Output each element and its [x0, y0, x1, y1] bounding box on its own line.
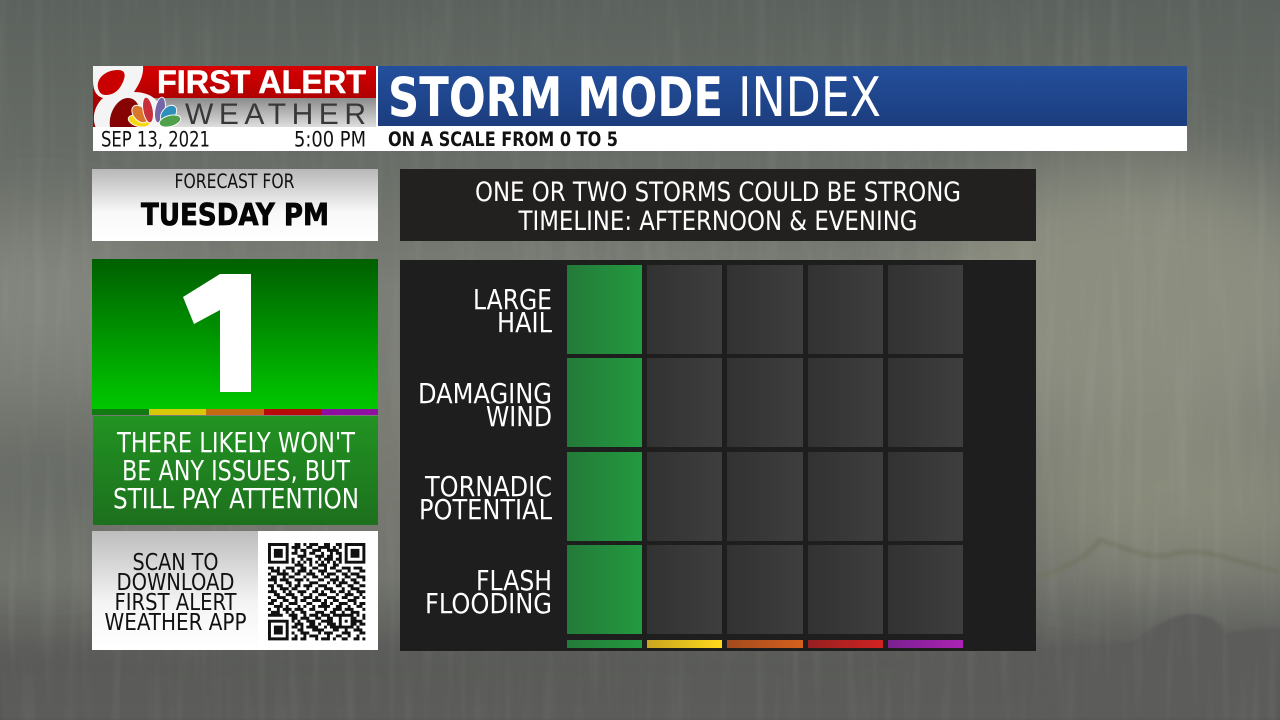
scale strip — [92, 409, 378, 415]
logo text: first alert: FIRST ALERT — [157, 64, 366, 100]
icon: NBC peacock — [127, 96, 182, 129]
title text: index: INDEX — [738, 66, 881, 129]
download text: WEATHER APP — [104, 610, 246, 636]
row: flash flooding: FLASH — [476, 564, 552, 597]
message line 2: BE ANY ISSUES, BUT — [122, 455, 351, 487]
row: tornadic potential: TORNADIC — [424, 470, 552, 503]
row: flash flooding: FLOODING — [425, 587, 552, 620]
row: tornadic potential: POTENTIAL — [419, 493, 552, 526]
row: flash flooding — [425, 545, 963, 634]
logo text: weather: WEATHER — [185, 98, 366, 131]
summary line 2: TIMELINE: AFTERNOON & EVENING — [518, 206, 918, 237]
icon: channel 8 numeral — [93, 66, 162, 127]
panel: storm summary — [400, 169, 1036, 241]
row: large hail: LARGE — [473, 283, 552, 316]
date: SEP 13, 2021 — [101, 128, 210, 152]
message line 3: STILL PAY ATTENTION — [113, 483, 359, 515]
panel: threat chart — [400, 260, 1036, 651]
panel: index value — [92, 259, 378, 415]
panel: forecast day — [92, 169, 378, 241]
panel: risk message — [93, 416, 378, 525]
time: 5:00 PM — [294, 128, 366, 152]
forecast day text: TUESDAY PM — [141, 198, 329, 233]
forecast label: FORECAST FOR — [174, 170, 294, 193]
panel: app download — [92, 531, 378, 650]
summary line 1: ONE OR TWO STORMS COULD BE STRONG — [475, 177, 961, 208]
big number 1 — [183, 274, 251, 392]
row: large hail: HAIL — [497, 306, 552, 339]
row: damaging wind — [418, 358, 963, 447]
row: large hail — [473, 265, 963, 354]
row: tornadic potential — [419, 452, 963, 541]
subtitle text: ON A SCALE FROM 0 TO 5 — [388, 128, 618, 151]
QR code — [268, 544, 365, 639]
title text: STORM MODE — [388, 66, 723, 129]
download text: SCAN TO — [132, 550, 218, 576]
title bar — [378, 66, 1187, 129]
row: damaging wind: DAMAGING — [418, 377, 552, 410]
date strip background — [93, 126, 1187, 151]
message line 1: THERE LIKELY WON'T — [116, 427, 356, 459]
scale key — [567, 640, 963, 648]
download text: DOWNLOAD — [116, 570, 234, 596]
download text — [104, 550, 246, 636]
header: station logo — [93, 64, 378, 152]
row: damaging wind: WIND — [486, 400, 552, 433]
download text: FIRST ALERT — [114, 590, 237, 616]
